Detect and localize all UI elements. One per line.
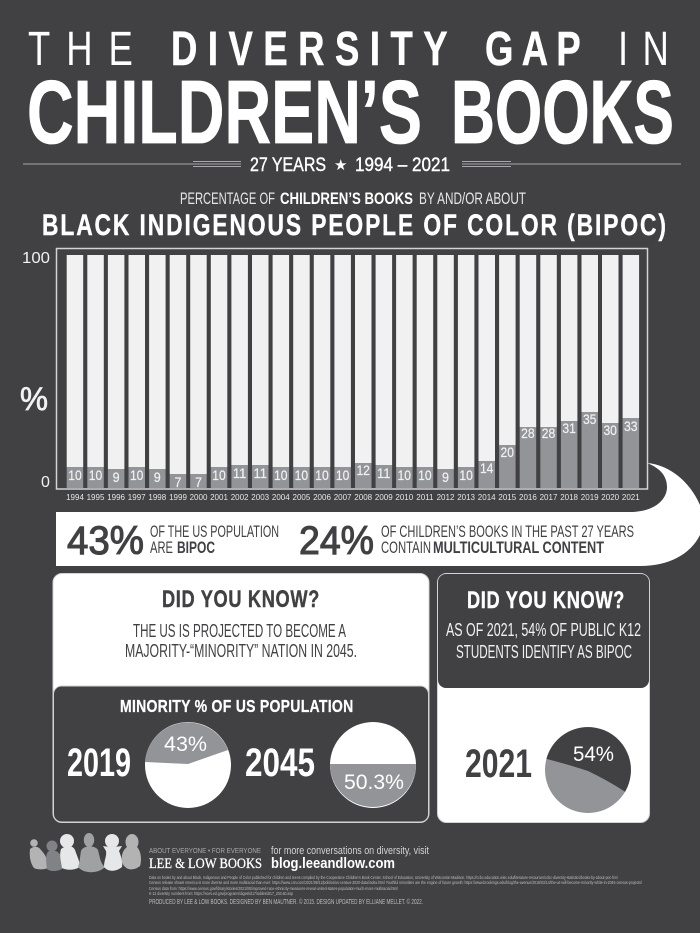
bar 2014: 14 — [480, 460, 494, 476]
pie: 2019: 43% — [164, 733, 207, 756]
bar 1997 — [128, 255, 146, 502]
bar 2013 — [457, 255, 476, 502]
bar 2012: 9 — [442, 469, 449, 485]
callout: 43 percent: ARE — [150, 538, 173, 557]
pie: 2021: 54% — [573, 743, 614, 766]
website call to action: blog.leeandlow.com — [271, 855, 395, 872]
sub-heading: MINORITY % OF US POPULATION — [120, 696, 353, 716]
publisher wordmark — [149, 846, 262, 872]
bar 1996 — [107, 255, 126, 502]
credits: PRODUCED BY LEE & LOW BOOKS. DESIGNED BY BEN MAUTNER. © 2015. DESIGN UPDATED BY ELLIANE MELLET. © 2022. — [149, 897, 423, 906]
bar 2017: 2017 — [540, 493, 558, 502]
panel: US projected majority-minority — [53, 574, 429, 822]
bar 2002 — [231, 255, 249, 502]
bar 2003: 11 — [253, 465, 267, 481]
bar 2020: 30 — [603, 422, 617, 438]
bar 2013: 10 — [459, 467, 473, 483]
bar 2008 — [354, 255, 373, 502]
silhouette 6 — [122, 834, 141, 869]
pie: 2019 — [145, 722, 231, 808]
title: GAP — [485, 22, 581, 76]
chart heading — [42, 189, 666, 242]
callout: 43 percent: OF THE US POPULATION — [150, 522, 279, 541]
title: CHILDREN’S — [27, 63, 422, 163]
title: THE — [28, 22, 133, 76]
bar 2001 — [210, 255, 228, 502]
subtitle: 27 years: ★ — [334, 156, 347, 174]
callout: 24 percent: 24% — [299, 519, 374, 563]
bar 2010: 2010 — [395, 493, 414, 502]
bar 2015: 20 — [501, 444, 514, 460]
bar 2015: 2015 — [498, 493, 517, 502]
text: projection — [125, 621, 357, 661]
bar 2005: 2005 — [293, 493, 311, 502]
callout: 24 percent: MULTICULTURAL CONTENT — [433, 538, 604, 557]
bar 2000: 2000 — [190, 493, 208, 502]
publisher wordmark: LEE & LOW BOOKS — [149, 856, 262, 872]
bar 2006 — [313, 255, 331, 502]
bar 2018 — [560, 255, 579, 502]
bar 2003: 2003 — [251, 493, 270, 502]
bar 2010: 10 — [398, 467, 411, 483]
pie: 2045 — [330, 722, 416, 808]
pie: 2045: 50.3% — [344, 771, 404, 794]
bar 2016: 28 — [521, 425, 535, 441]
bar 2003 — [251, 255, 270, 502]
text: projection: MAJORITY-“MINORITY” NATION IN 2045. — [125, 641, 357, 661]
label: 2019: 2019 — [67, 741, 131, 785]
y axis labels — [20, 250, 50, 491]
callout: 43 percent: BIPOC — [177, 538, 215, 557]
bar 1997: 10 — [130, 467, 144, 483]
bar 2000: 7 — [195, 474, 202, 490]
bar 1998: 1998 — [148, 493, 167, 502]
logo: children silhouettes — [30, 833, 141, 872]
callout: 24 percent — [299, 519, 634, 563]
y axis labels: % — [20, 381, 48, 417]
subtitle: 27 years: 27 YEARS — [250, 155, 326, 176]
bar 2011: 10 — [418, 467, 432, 483]
bar 1994 — [66, 255, 84, 502]
callout: 43 percent: 43% — [67, 519, 144, 563]
bar 2012: 2012 — [437, 493, 455, 502]
bar 2021 — [622, 255, 640, 502]
bar 2010 — [395, 255, 414, 502]
bar 1997: 1997 — [128, 493, 146, 502]
bar 2005 — [293, 255, 311, 502]
bar 2009 — [375, 255, 393, 502]
bar 2015 — [498, 255, 517, 502]
bar 2020: 2020 — [601, 493, 620, 502]
bar 1994: 10 — [68, 467, 82, 483]
bar 2005: 10 — [295, 467, 308, 483]
title: DIVERSITY — [171, 22, 448, 76]
bar 2004: 10 — [274, 467, 288, 483]
sub-panel: minority percent of US population — [54, 686, 428, 822]
bar chart — [56, 248, 648, 502]
y axis labels: 100 — [22, 250, 50, 267]
bar 2016: 2016 — [519, 493, 537, 502]
heading: did you know: DID YOU KNOW? — [162, 586, 319, 613]
silhouette 4 — [78, 833, 105, 872]
callout: 24 percent: CONTAIN — [381, 538, 431, 557]
website call to action — [271, 845, 429, 872]
bar 2011 — [416, 255, 434, 502]
white callout band shape — [56, 463, 700, 566]
bar 2009: 11 — [377, 465, 391, 481]
bar 2020 — [601, 255, 620, 502]
bar 2017: 28 — [542, 425, 555, 441]
bar 2018: 31 — [562, 420, 576, 436]
chart heading: BLACK INDIGENOUS PEOPLE OF COLOR (BIPOC) — [42, 208, 666, 242]
bar 2001: 10 — [212, 467, 226, 483]
silhouette 3 — [60, 834, 80, 870]
bar 2002: 2002 — [231, 493, 249, 502]
chart heading: BY AND/OR ABOUT — [419, 189, 526, 208]
silhouette 1 — [30, 839, 49, 869]
bar 1999: 7 — [174, 474, 182, 490]
bar 1995: 10 — [89, 467, 102, 483]
sources fine print: K-12 diversity numbers from: https://nces.ed.gov/programs/digest/d17/tables/dt17_203.60.asp — [149, 891, 294, 896]
website call to action: for more conversations on diversity, visit — [271, 845, 429, 857]
bar 2021: 33 — [624, 418, 638, 434]
bar 2000 — [190, 255, 208, 502]
bar 2014 — [478, 255, 496, 502]
bar 2006: 10 — [315, 467, 329, 483]
sources fine print: Census data from: https://www.census.gov/library/stories/2021/08/improved-race-ethnicity-measures-reveal-united-states-population-much-more-multiracial.html — [149, 886, 398, 891]
title: IN — [618, 22, 669, 76]
bar 2004: 2004 — [272, 493, 290, 502]
bar 1996: 9 — [113, 469, 120, 485]
title — [27, 22, 674, 163]
bar 2021: 2021 — [622, 493, 640, 502]
text: projection: THE US IS PROJECTED TO BECOME A — [133, 621, 346, 641]
bar 1998 — [148, 255, 167, 502]
bar 2008: 2008 — [354, 493, 373, 502]
bar 2013: 2013 — [457, 493, 476, 502]
bar 2006: 2006 — [313, 493, 331, 502]
subtitle: 27 years: 1994 – 2021 — [355, 155, 450, 176]
bar 2007: 2007 — [334, 493, 352, 502]
y axis labels: 0 — [41, 474, 50, 491]
text: K12 fact — [446, 620, 641, 662]
heading: did you know: DID YOU KNOW? — [467, 587, 624, 614]
bar 2007: 10 — [336, 467, 350, 483]
panel: K12 students — [438, 574, 650, 822]
silhouette 2 — [46, 840, 64, 871]
bar 2001: 2001 — [210, 493, 228, 502]
bar 2012 — [437, 255, 455, 502]
chart heading: CHILDREN’S BOOKS — [280, 189, 413, 208]
chart heading: PERCENTAGE OF — [180, 189, 275, 208]
bar 1996: 1996 — [107, 493, 126, 502]
label: 2045: 2045 — [245, 741, 315, 785]
bar 2019: 35 — [583, 411, 597, 427]
bar 2011: 2011 — [416, 493, 434, 502]
bar 2017 — [540, 255, 558, 502]
bar 2002: 11 — [233, 465, 247, 481]
publisher wordmark: ABOUT EVERYONE • FOR EVERYONE — [149, 846, 261, 855]
subtitle: 27 years — [23, 155, 681, 176]
sources fine print — [149, 875, 643, 896]
bar 1994: 1994 — [66, 493, 84, 502]
label: 2021: 2021 — [465, 742, 532, 786]
bar 2004 — [272, 255, 290, 502]
bar 2007 — [334, 255, 352, 502]
dark header block — [438, 574, 649, 688]
bar 1995: 1995 — [87, 493, 105, 502]
bar 2009: 2009 — [375, 493, 393, 502]
pie: 2021 — [545, 727, 631, 813]
bar 1999: 1999 — [169, 493, 187, 502]
silhouette 5 — [103, 834, 122, 871]
callout: 43 percent — [67, 519, 279, 563]
bar 1995 — [87, 255, 105, 502]
bar 2014: 2014 — [478, 493, 496, 502]
bar 2019 — [581, 255, 599, 502]
bar 2019: 2019 — [581, 493, 599, 502]
bar 2018: 2018 — [560, 493, 579, 502]
bar 1999 — [169, 255, 187, 502]
bar 2008: 12 — [356, 462, 370, 478]
bar 1998: 9 — [154, 469, 161, 485]
bar 2016 — [519, 255, 537, 502]
